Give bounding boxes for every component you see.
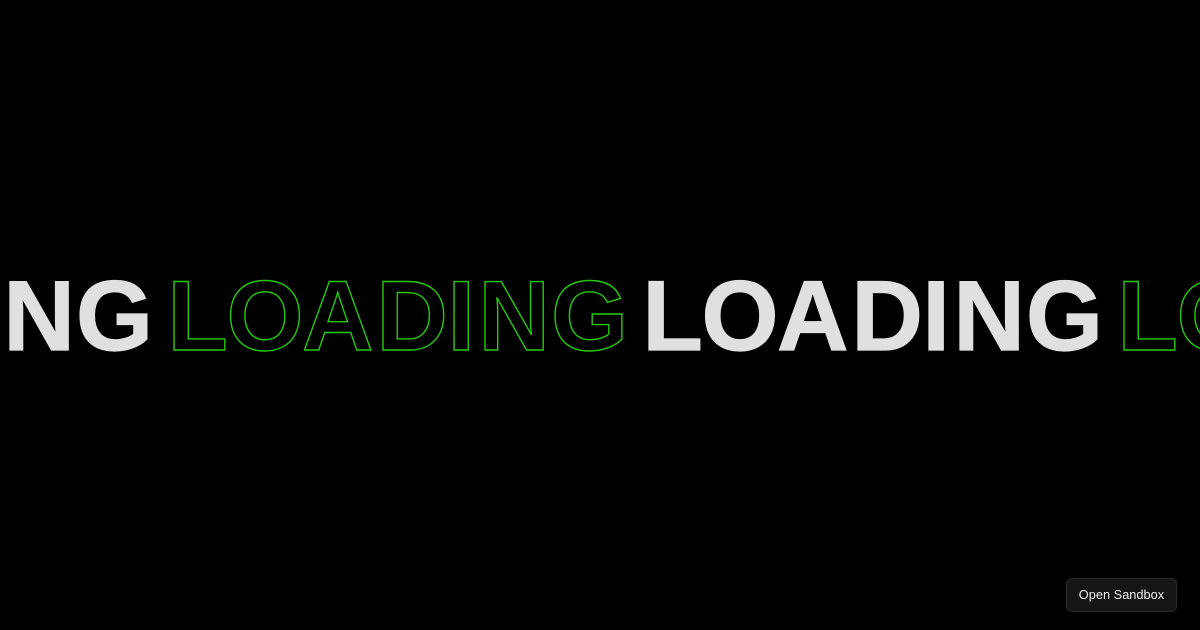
button: open sandbox: Open Sandbox xyxy=(1079,587,1164,602)
outlined green word: LOADING xyxy=(167,260,628,371)
button: open sandbox xyxy=(1066,578,1177,612)
solid white word: LOADING xyxy=(642,260,1103,371)
